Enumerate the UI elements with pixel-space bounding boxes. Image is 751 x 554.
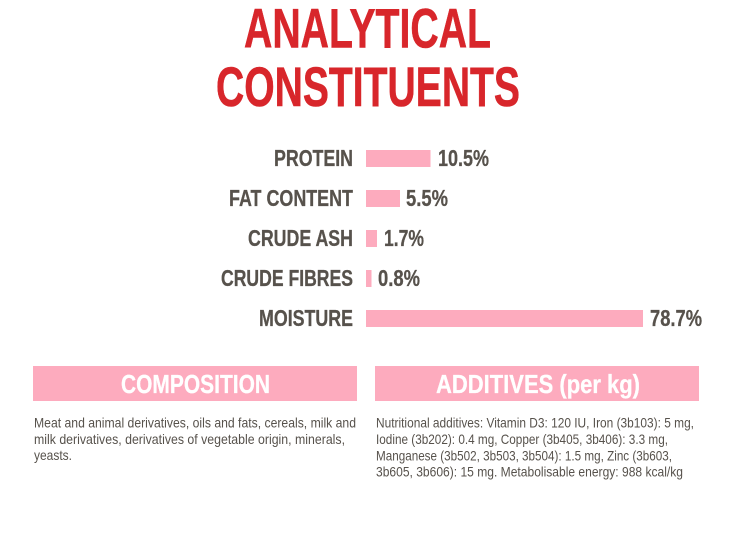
- row: protein: 10.5%: [438, 145, 489, 171]
- text block: additives: [376, 414, 694, 480]
- row: moisture: 78.7%: [650, 305, 702, 331]
- text block: composition: yeasts.: [34, 447, 72, 463]
- text block: composition: Meat and animal derivatives, oils and fats, cereals, milk and: [34, 414, 356, 430]
- row: crude ash: CRUDE ASH: [248, 225, 353, 251]
- row: protein: PROTEIN: [274, 145, 353, 171]
- row: crude fibres: 0.8%: [378, 265, 420, 291]
- heading: additives: [375, 366, 699, 401]
- text block: additives: Iodine (3b202): 0.4 mg, Copper (3b405, 3b406): 3.3 mg,: [376, 431, 668, 447]
- text block: composition: milk derivatives, derivatives of vegetable origin, minerals,: [34, 431, 345, 447]
- text block: additives: Manganese (3b502, 3b503, 3b504): 1.5 mg, Zinc (3b603,: [376, 448, 672, 464]
- text block: composition: [34, 414, 356, 463]
- text block: additives: 3b605, 3b606): 15 mg. Metabolisable energy: 988 kcal/kg: [376, 464, 683, 480]
- row: crude fibres: CRUDE FIBRES: [221, 265, 353, 291]
- panel: additives: [375, 366, 699, 480]
- row: crude ash: 1.7%: [384, 225, 424, 251]
- heading: composition: [33, 366, 357, 401]
- heading: composition: COMPOSITION: [121, 369, 270, 399]
- panel: composition: [33, 366, 357, 463]
- text block: additives: Nutritional additives: Vitamin D3: 120 IU, Iron (3b103): 5 mg,: [376, 414, 694, 430]
- bar chart: [221, 145, 702, 331]
- row: moisture: [259, 305, 702, 331]
- heading: additives: ADDITIVES (per kg): [436, 369, 640, 399]
- row: fat content: 5.5%: [406, 185, 448, 211]
- row: moisture: MOISTURE: [259, 305, 353, 331]
- title: CONSTITUENTS: [216, 55, 520, 118]
- row: protein: [274, 145, 489, 171]
- title: [216, 0, 520, 118]
- row: fat content: FAT CONTENT: [229, 185, 353, 211]
